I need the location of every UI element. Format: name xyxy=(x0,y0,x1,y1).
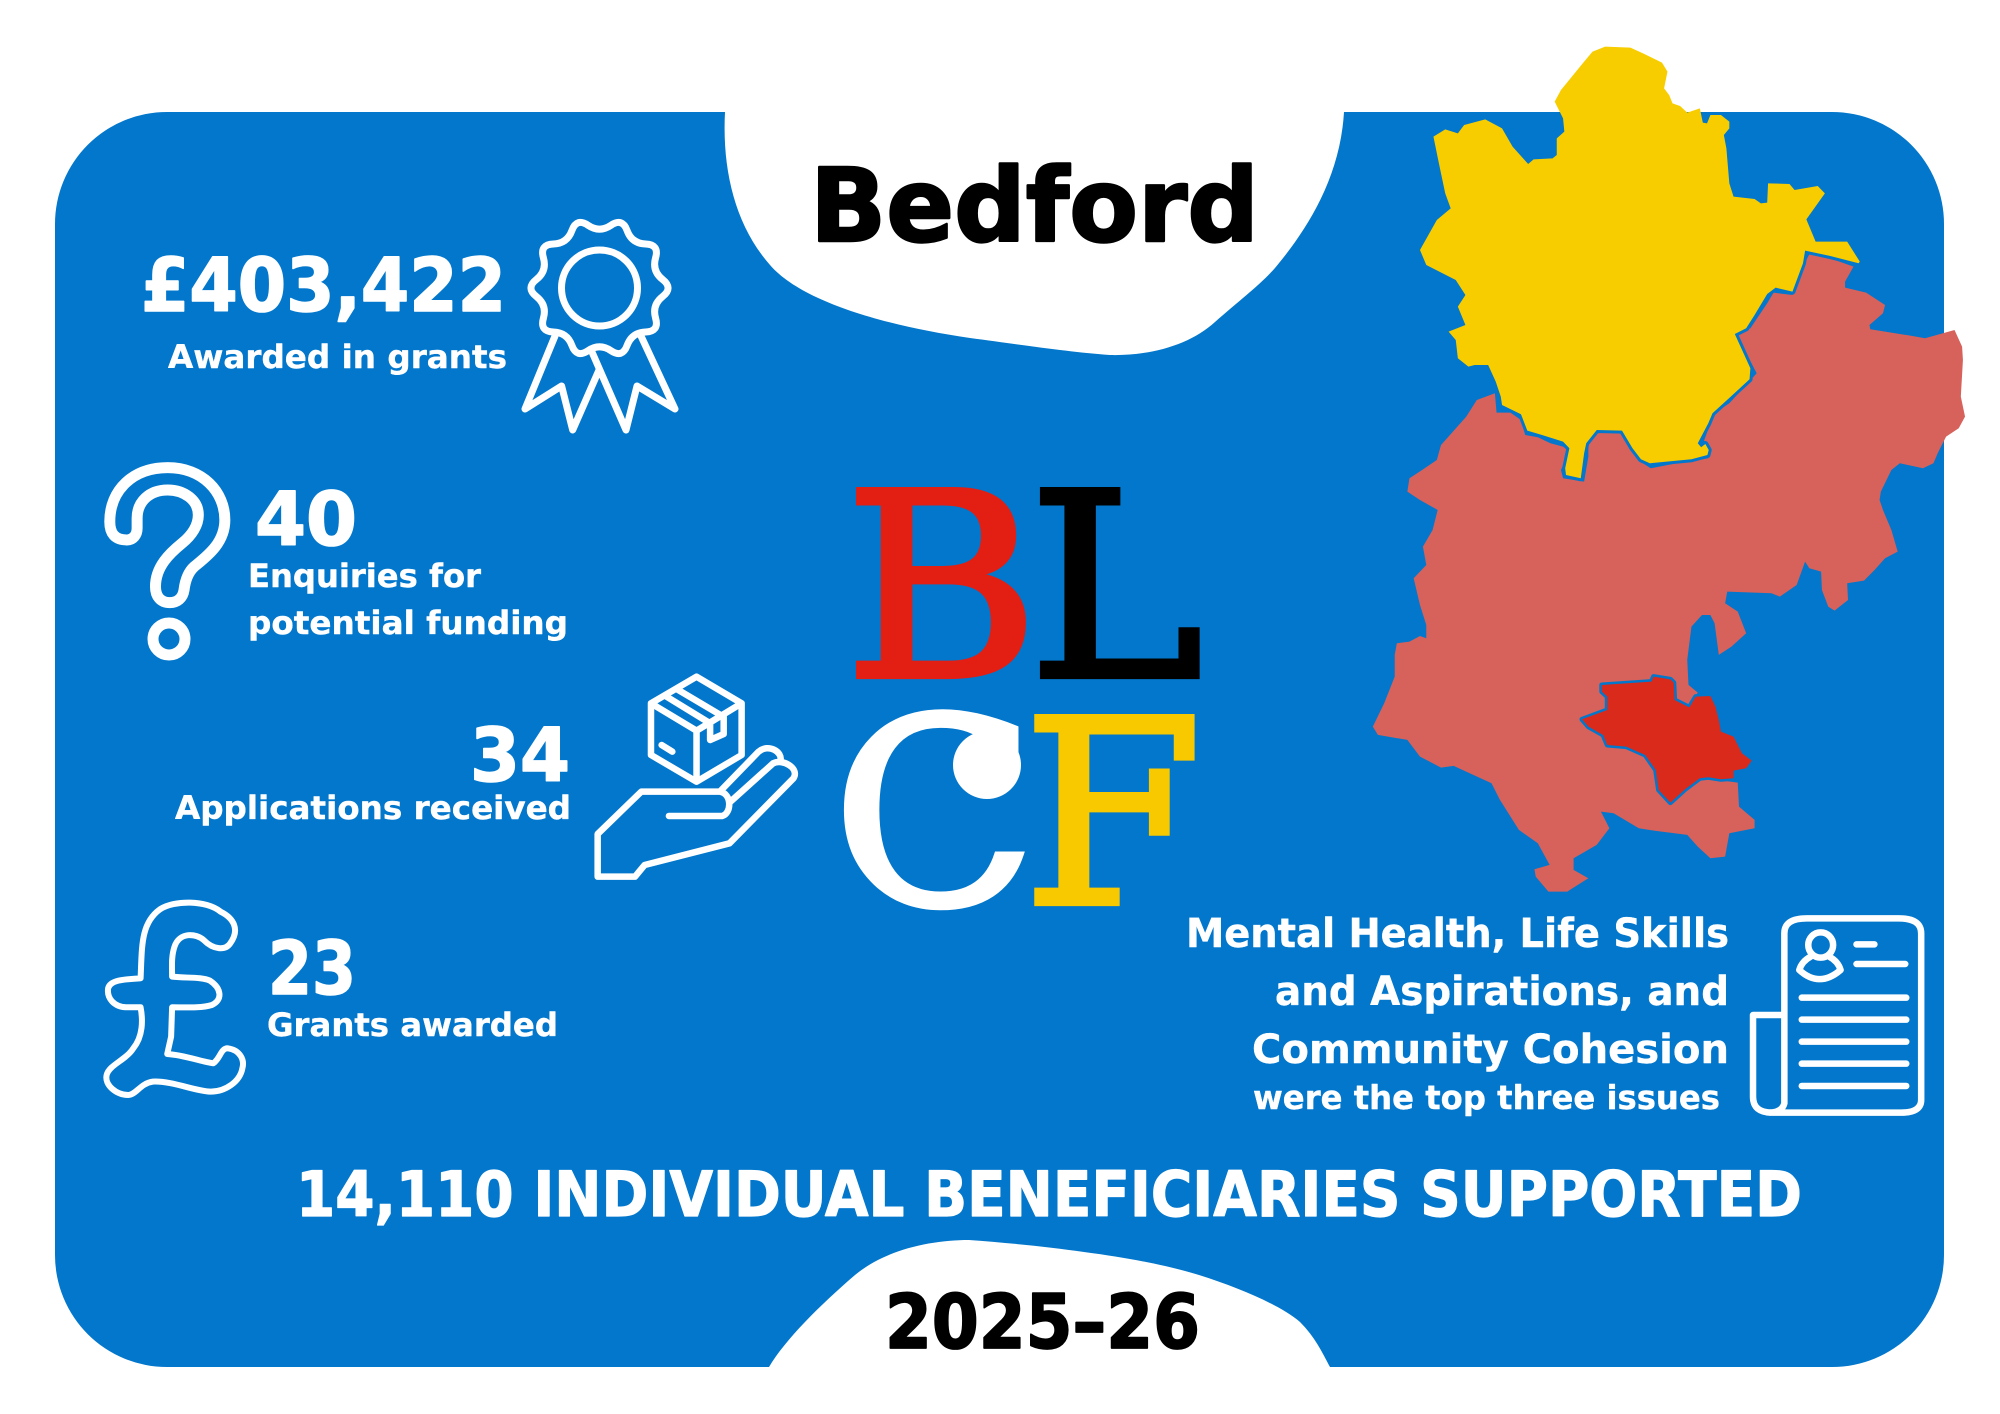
title: Bedford: Bedford xyxy=(810,147,1259,266)
issues line three: Community Cohesion xyxy=(1252,1027,1729,1073)
applications label: Applications received xyxy=(175,789,571,827)
map: gap around yellow area xyxy=(1496,251,1859,478)
icon: rosette xyxy=(525,222,675,430)
beneficiaries headline: 14,110 INDIVIDUAL BENEFICIARIES SUPPORTED xyxy=(296,1158,1802,1231)
enquiries label line two: potential funding xyxy=(248,604,568,642)
map: surrounding area in pink xyxy=(1373,254,1965,892)
issues line four: were the top three issues xyxy=(1253,1078,1720,1117)
logo letter F: F xyxy=(1022,665,1203,964)
enquiries figure: 40 xyxy=(255,477,357,563)
year: 2025–26: 2025–26 xyxy=(885,1278,1200,1366)
stat: enquiries xyxy=(248,477,568,642)
applications figure: 34 xyxy=(470,713,570,799)
icon: pound sign xyxy=(106,903,243,1095)
icon: question mark xyxy=(110,468,225,655)
grants label: Grants awarded xyxy=(267,1006,558,1044)
map: Central area in yellow xyxy=(1420,47,1860,478)
white year blob xyxy=(769,1240,1330,1370)
issues line two: and Aspirations, and xyxy=(1275,969,1729,1015)
icon: document with person xyxy=(1753,918,1921,1113)
white title blob xyxy=(725,105,1344,355)
BLCF logo xyxy=(832,438,1203,966)
logo letter C: C xyxy=(832,665,1037,966)
issues line one: Mental Health, Life Skills xyxy=(1186,911,1729,957)
grants figure: 23 xyxy=(268,926,356,1012)
map: Bedford area highlighted in red xyxy=(1582,677,1752,803)
logo letter L: L xyxy=(1028,439,1203,738)
amount figure: £403,422 xyxy=(141,243,506,329)
stat: grants awarded xyxy=(267,926,558,1044)
stat: amount awarded xyxy=(141,243,507,376)
amount label: Awarded in grants xyxy=(168,338,507,376)
enquiries label: Enquiries for xyxy=(248,557,481,595)
stat: applications xyxy=(175,713,571,827)
logo letter B: B xyxy=(844,438,1039,737)
top three issues text xyxy=(1186,911,1729,1117)
map of Bedfordshire and surrounding areas xyxy=(1373,47,1965,892)
icon: hand holding box xyxy=(598,677,795,877)
